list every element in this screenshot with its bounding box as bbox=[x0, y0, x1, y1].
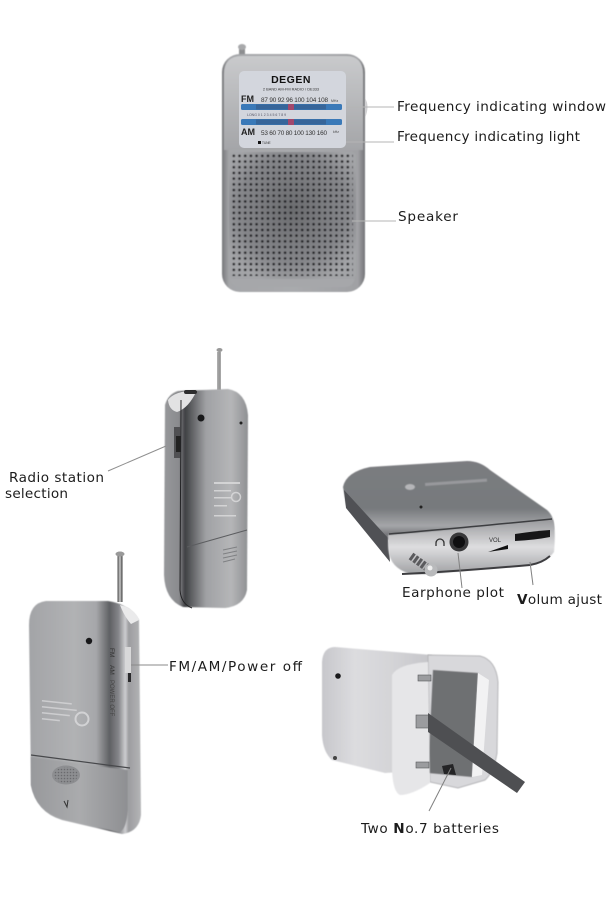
label: FM/AM/Power off: FM/AM/Power off bbox=[169, 659, 303, 675]
end panel bbox=[388, 520, 555, 574]
frequency dial face: 53 60 70 80 100 130 160 bbox=[261, 130, 327, 137]
frequency dial face: kHz bbox=[333, 130, 339, 134]
radio: side view bbox=[164, 348, 248, 608]
left side edge bbox=[344, 490, 390, 562]
power switch bbox=[125, 647, 131, 682]
battery cover line bbox=[31, 755, 130, 768]
antenna bbox=[216, 348, 222, 390]
label: radio station selection: Radio station bbox=[9, 470, 104, 486]
back print bbox=[214, 482, 240, 516]
body bbox=[322, 647, 432, 773]
frequency dial face: FM bbox=[241, 94, 254, 104]
antenna tip bbox=[238, 44, 246, 58]
antenna bbox=[116, 552, 124, 602]
label: radio station selection: selection bbox=[5, 486, 68, 502]
cavity bbox=[428, 670, 478, 777]
label: two no.7 batteries: Two No.7 batteries bbox=[360, 821, 499, 837]
tuning wheel bbox=[174, 427, 181, 458]
frequency dial face: 2 BAND AM-FM RADIO / DE333 bbox=[263, 86, 319, 92]
volume wheel bbox=[515, 530, 550, 541]
clips bbox=[416, 675, 431, 768]
frequency dial face bbox=[239, 71, 346, 148]
frequency dial face: MHz bbox=[331, 99, 338, 103]
open frame bbox=[428, 655, 498, 788]
frequency dial face: AM bbox=[241, 127, 255, 137]
frequency dial face: TUNE bbox=[262, 141, 271, 145]
back print bbox=[42, 700, 88, 726]
label: earphone plot: Earphone plot bbox=[402, 585, 504, 601]
label: frequency indicating light: Frequency indicating light bbox=[397, 129, 580, 145]
radio: back view: POWER OFF bbox=[108, 680, 114, 717]
radio: back view bbox=[29, 552, 141, 834]
cover shell bbox=[392, 662, 430, 795]
brand: DEGEN bbox=[271, 74, 311, 86]
body top bbox=[343, 461, 554, 540]
body bbox=[29, 601, 141, 834]
leader: batteries bbox=[429, 768, 451, 811]
cover vents bbox=[223, 547, 237, 562]
holes bbox=[198, 414, 204, 422]
label: speaker: Speaker bbox=[398, 209, 458, 225]
speaker grille bbox=[229, 152, 356, 287]
label: volum ajust: Volum ajust bbox=[517, 592, 602, 608]
earphone plug bbox=[411, 556, 438, 576]
leaders: earphone and volume bbox=[458, 553, 533, 588]
battery cover line bbox=[187, 530, 247, 547]
battery cover bbox=[31, 757, 128, 832]
top silver cap bbox=[168, 390, 197, 412]
radio: open battery compartment bbox=[322, 647, 525, 795]
radio: back view: AM bbox=[108, 665, 115, 675]
radio: bottom end view bbox=[343, 461, 555, 576]
leader: radio station selection bbox=[108, 446, 166, 471]
leader lines: front view bbox=[346, 107, 396, 221]
hole bbox=[86, 638, 92, 644]
frequency dial face: LONG 0 1 2 3 4 5 6 7 8 9 bbox=[247, 113, 286, 117]
print bbox=[405, 479, 487, 490]
cover vent bbox=[52, 766, 80, 784]
body bbox=[164, 389, 248, 608]
earphone jack bbox=[450, 532, 468, 552]
silver top corner bbox=[120, 605, 139, 624]
switch labels: FM bbox=[108, 648, 115, 657]
leader: power switch bbox=[131, 664, 168, 666]
volume side bump bbox=[365, 98, 368, 118]
batteries contact bbox=[442, 764, 456, 775]
radio: bottom end view: VOL bbox=[489, 538, 502, 544]
fabric ribbon bbox=[428, 713, 525, 793]
frequency dial face: 87 90 92 96 100 104 108 bbox=[261, 97, 328, 104]
radio body bbox=[222, 54, 365, 292]
radio: front view bbox=[222, 44, 368, 292]
label: frequency indicating window: Frequency indicating window bbox=[397, 99, 606, 115]
